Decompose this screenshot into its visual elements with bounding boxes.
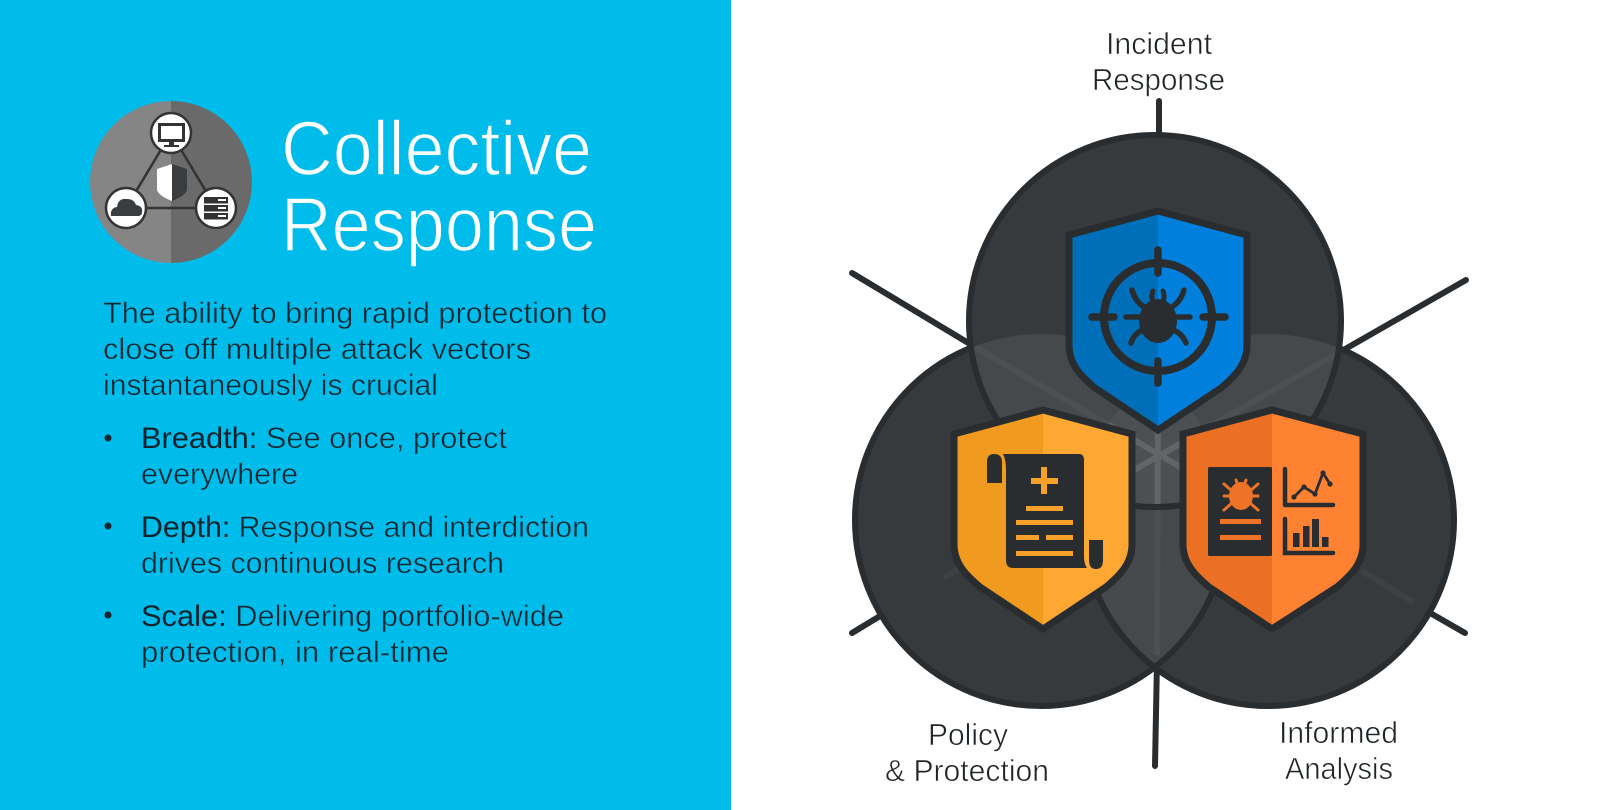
circle: incident: [969, 135, 1341, 507]
outline: incident: [969, 135, 1341, 507]
icon: centre shield: [157, 164, 187, 201]
icon: cloud: [106, 188, 146, 228]
text block: intro: [103, 297, 607, 402]
title: [281, 106, 597, 268]
icon: scroll: [987, 454, 1103, 569]
text block: breadth bullet: Breadth: See once, protect: [141, 422, 508, 455]
circle: analysis: [1082, 334, 1454, 706]
panel: blue left panel: [0, 0, 731, 810]
icon: blue shield with bug target: [1069, 211, 1247, 430]
text block: breadth bullet: [104, 422, 508, 491]
title: Collective: [281, 106, 592, 192]
text block: breadth bullet: everywhere: [141, 458, 298, 491]
overlaps with incident: [974, 334, 1336, 504]
label: incident response: Response: [1092, 62, 1225, 97]
icon: report document: [1208, 467, 1272, 556]
text block: scale bullet: Scale: Delivering portfolio-wide: [141, 600, 564, 633]
icon: bug: [1126, 290, 1190, 343]
spokes: [852, 101, 1466, 766]
text block: depth bullet: [104, 511, 589, 580]
icon: monitor: [151, 113, 191, 153]
text block: scale bullet: [104, 600, 564, 669]
text block: depth bullet: Depth: Response and interdiction: [141, 511, 589, 544]
text block: depth bullet: drives continuous research: [141, 547, 504, 580]
label: informed analysis: Analysis: [1285, 751, 1393, 786]
faint spokes inside overlaps: [1108, 422, 1180, 504]
icon: server: [196, 188, 236, 228]
icon: bar chart: [1285, 519, 1333, 553]
icon: orange shield with analysis report: [1183, 410, 1363, 629]
text block: scale bullet: protection, in real-time: [141, 636, 449, 669]
label: incident response: [1092, 26, 1225, 97]
chart: venn diagram: [852, 101, 1466, 766]
icon: yellow shield with policy scroll: [954, 410, 1132, 629]
label: policy and protection: [885, 717, 1049, 788]
title: Response: [281, 182, 597, 268]
arcs between policy and analysis: [1126, 592, 1214, 667]
icon: collective response logo: [90, 101, 252, 263]
label: policy and protection: & Protection: [885, 753, 1049, 788]
text block: intro: The ability to bring rapid protection to: [103, 297, 607, 330]
label: incident response: Incident: [1106, 26, 1212, 61]
label: informed analysis: [1279, 715, 1398, 786]
text block: intro: close off multiple attack vectors: [103, 333, 531, 366]
label: informed analysis: Informed: [1279, 715, 1398, 750]
overlap: policy and analysis: [1101, 508, 1210, 664]
circle: policy: [855, 334, 1227, 706]
icon: target reticle: [1092, 250, 1225, 383]
text block: intro: instantaneously is crucial: [103, 369, 438, 402]
label: policy and protection: Policy: [928, 717, 1008, 752]
icon: line chart: [1285, 469, 1333, 505]
